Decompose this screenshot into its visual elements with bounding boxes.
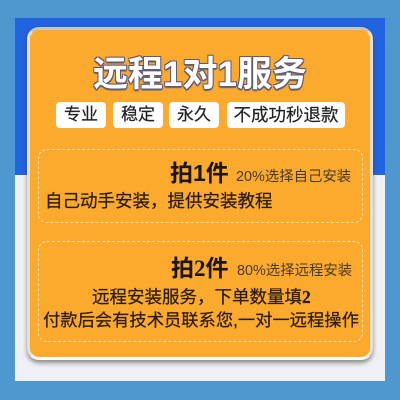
tag: 专业: 专业: [64, 105, 98, 124]
main orange card: [27, 27, 373, 360]
tag: 专业: [56, 102, 106, 128]
note: 20 percent: 20%选择自己安装: [236, 169, 351, 185]
panel: buy two: [38, 241, 363, 342]
text: contact after payment: 付款后会有技术员联系您,一对一远程操作: [43, 310, 359, 330]
tag: 不成功秒退款: [227, 102, 345, 128]
tag: 稳定: [113, 102, 163, 128]
heading: buy two: 拍2件: [171, 255, 228, 281]
tag: 稳定: 稳定: [121, 105, 155, 124]
text: remote install: 远程安装服务，下单数量填2: [92, 287, 311, 307]
text: self install: 自己动手安装，提供安装教程: [45, 191, 272, 211]
tag: 永久: [169, 102, 219, 128]
tag: 永久: 永久: [177, 105, 211, 124]
tag: 不成功秒退款: 不成功秒退款: [234, 105, 338, 125]
title: 远程1对1服务: [93, 55, 307, 94]
panel: buy one: [38, 149, 363, 223]
note: 80 percent: 80%选择远程安装: [237, 263, 352, 279]
blue upper band: [15, 18, 385, 175]
heading: buy one: 拍1件: [170, 160, 229, 186]
